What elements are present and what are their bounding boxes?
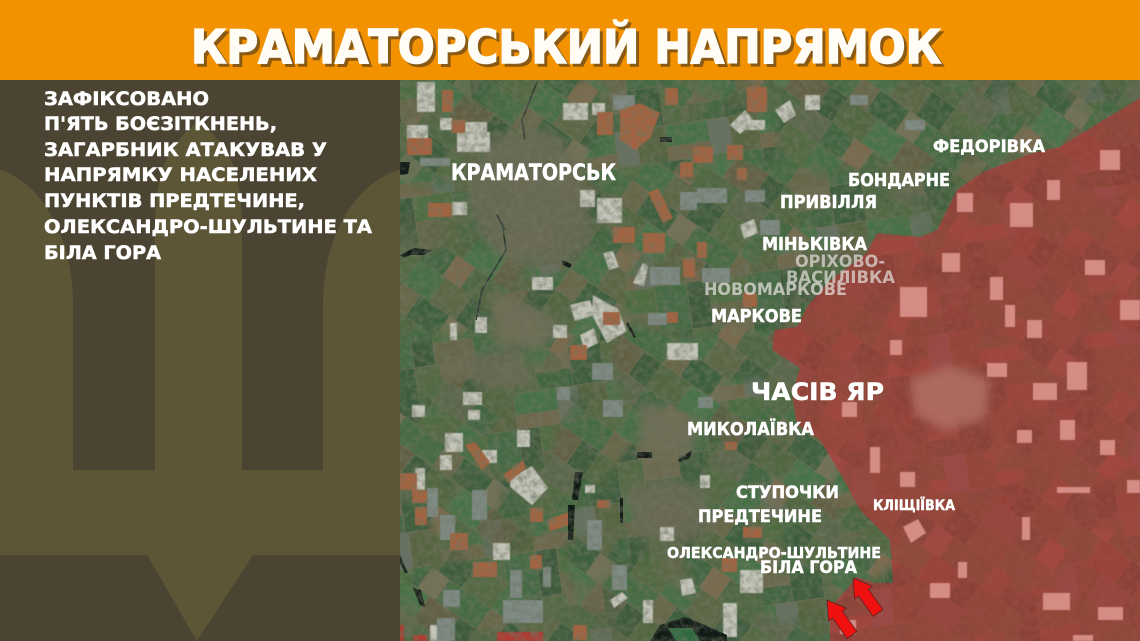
label: Novomarkove: НОВОМАРКОВЕ — [704, 280, 847, 300]
label: Bondarne: БОНДАРНЕ — [848, 171, 950, 191]
label: Fedorivka: ФЕДОРІВКА — [933, 137, 1046, 157]
label: Chasiv Yar: ЧАСІВ ЯР — [751, 378, 884, 406]
summary text block: БІЛА ГОРА — [44, 242, 161, 264]
label: Predtechyne: ПРЕДТЕЧИНЕ — [698, 507, 822, 527]
title: КРАМАТОРСЬКИЙ НАПРЯМОК — [194, 23, 944, 77]
summary text block: ПУНКТІВ ПРЕДТЕЧИНЕ, — [44, 190, 305, 212]
arrow: attack direction left — [827, 600, 857, 638]
label: Pryvillia: ПРИВІЛЛЯ — [780, 193, 877, 213]
label: Minkivka: МІНЬКІВКА — [762, 235, 867, 255]
grey fields — [420, 95, 925, 641]
summary text block — [44, 88, 372, 264]
occupied territory overlay — [772, 98, 1140, 641]
label: Oleksandro-Shultyne: ОЛЕКСАНДРО-ШУЛЬТИНЕ — [667, 544, 881, 562]
summary text block: ОЛЕКСАНДРО-ШУЛЬТИНЕ ТА — [44, 216, 372, 238]
pale fields in occupied territory — [840, 150, 1140, 641]
left panel — [0, 80, 400, 641]
urban areas — [460, 125, 715, 545]
arrows — [827, 578, 883, 638]
lakes and rivers — [400, 137, 727, 641]
orange fields — [400, 87, 767, 641]
white fields — [407, 82, 820, 641]
label: Mykolaivka: МИКОЛАЇВКА — [687, 418, 814, 440]
summary text block: НАПРЯМКУ НАСЕЛЕНИХ — [44, 164, 317, 186]
place labels — [451, 137, 1046, 578]
summary text block: ЗАГАРБНИК АТАКУВАВ У — [44, 139, 327, 161]
summary text block: П'ЯТЬ БОЄЗІТКНЕНЬ, — [44, 113, 277, 135]
label: Bila Hora: БІЛА ГОРА — [760, 558, 858, 578]
label: Orikhovo-Vasylivka: ОРІХОВО- — [795, 252, 885, 272]
title banner — [0, 0, 1140, 80]
label: Stupochky: СТУПОЧКИ — [736, 483, 839, 503]
label: Markove: МАРКОВЕ — [711, 307, 802, 327]
Chasiv Yar urban area — [910, 365, 990, 430]
label: Orikhovo-Vasylivka — [788, 254, 895, 283]
texture — [400, 80, 1140, 641]
satellite map — [400, 80, 1140, 641]
summary text block: ЗАФІКСОВАНО — [44, 88, 209, 110]
label: Kramatorsk: КРАМАТОРСЬК — [451, 161, 616, 186]
muted tone — [400, 80, 1140, 641]
arrow: attack direction right — [853, 578, 883, 616]
icon: trident watermark — [0, 122, 400, 641]
title: КРАМАТОРСЬКИЙ НАПРЯМОК — [191, 20, 941, 74]
label: Klishchiivka: КЛІЩІЇВКА — [873, 497, 956, 514]
label: Orikhovo-Vasylivka: ВАСИЛІВКА — [786, 268, 896, 288]
